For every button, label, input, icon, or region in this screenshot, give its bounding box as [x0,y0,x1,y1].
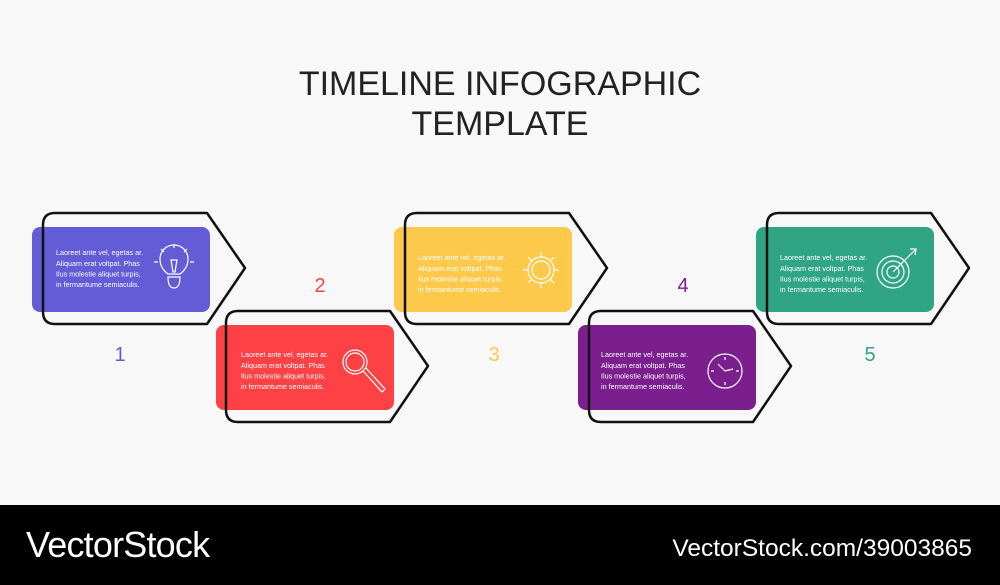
step 2: Ilus molestie aliquet turpis, [241,372,326,380]
step 4: Ilus molestie aliquet turpis, [601,372,686,380]
title: TEMPLATE [412,105,588,143]
number 5: 5 [864,344,876,366]
step 5: Aliquam erat voltpat. Phas [780,264,864,273]
icon: lightbulb [154,244,194,288]
step 2 [216,311,428,422]
number 2: 2 [314,275,326,297]
step 4 [578,311,791,422]
footer bar: VectorStock.com/39003865 [672,535,972,562]
step 4: Laoreet ante vel, egetas ar. [601,350,688,359]
step 2: in fermantume semiaculis. [241,382,324,391]
icon: magnifier [343,350,385,392]
step 1 [32,213,245,324]
step 1: Ilus molestie aliquet turpis, [56,270,141,278]
step 1: Laoreet ante vel, egetas ar. [56,248,143,257]
title: TIMELINE INFOGRAPHIC [299,65,701,103]
step 4: Aliquam erat voltpat. Phas [601,361,685,370]
step 4: in fermantume semiaculis. [601,382,684,391]
step 3: Ilus molestie aliquet turpis, [418,274,503,284]
step 2: Laoreet ante vel, egetas ar. [241,350,328,359]
step 3: in fermantume semiaculis. [418,285,502,294]
number 3: 3 [488,344,500,366]
step 3: Laoreet ante vel, egetas ar. [418,253,505,262]
icon: target [877,249,916,288]
step 5: in fermantume semiaculis. [780,285,864,294]
number 4: 4 [677,275,689,297]
footer bar [0,505,1000,585]
step 5 [756,213,969,324]
number 1: 1 [114,344,126,366]
icon: clock [708,354,742,388]
step 1: in fermantume semiaculis. [56,280,140,289]
step 1: Aliquam erat voltpat. Phas [56,259,140,268]
step 3: Aliquam erat voltpat. Phas [418,264,502,273]
footer bar: VectorStock [26,524,211,565]
title [299,65,701,143]
icon: gear [523,252,559,288]
step 3 [394,213,607,324]
step 5: Ilus molestie aliquet turpis, [780,274,865,284]
step 2: Aliquam erat voltpat. Phas [241,361,325,370]
step 5: Laoreet ante vel, egetas ar. [780,253,867,262]
